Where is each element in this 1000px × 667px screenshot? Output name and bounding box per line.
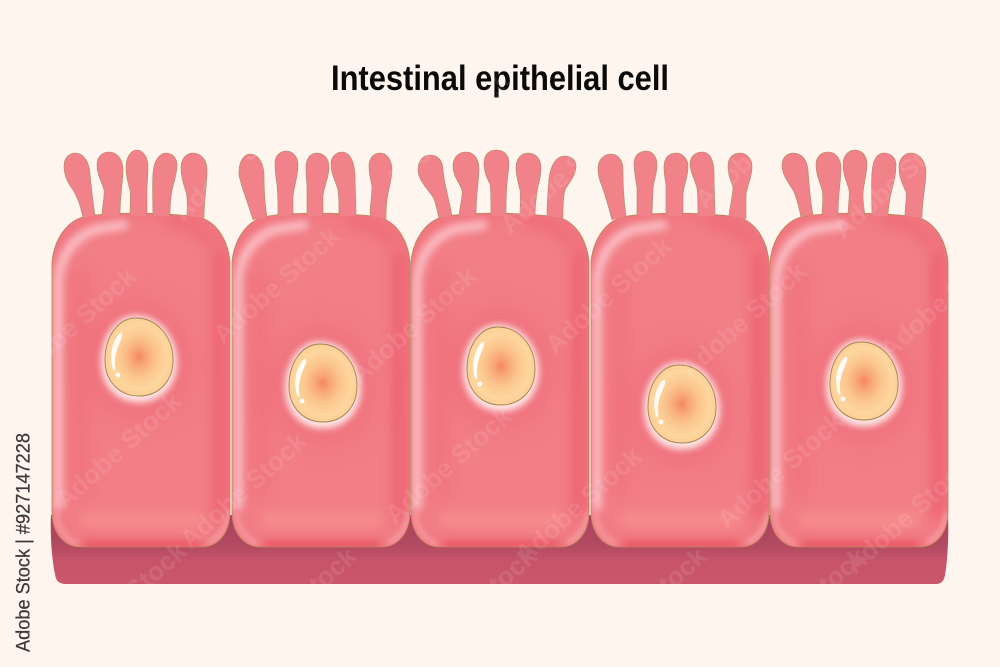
watermark pattern: Adobe Stock — [174, 425, 313, 554]
watermark pattern: Adobe Stock — [689, 85, 828, 214]
cell 5 — [770, 213, 948, 547]
nucleus 4 — [631, 348, 733, 464]
watermark pattern: Adobe Stock — [494, 110, 633, 239]
watermark pattern: Adobe Stock — [839, 450, 978, 579]
watermark pattern: Adobe Stock — [344, 260, 483, 389]
watermark pattern: Adobe Stock — [207, 220, 346, 349]
basement layer — [51, 515, 948, 584]
microvilli: cell 2 — [239, 151, 392, 220]
watermark pattern: Adobe Stock — [4, 260, 143, 389]
title: Intestinal epithelial cell — [331, 59, 669, 98]
watermark pattern: Adobe Stock — [167, 97, 306, 226]
microvilli: cell 3 — [418, 150, 576, 218]
cell 4 — [591, 213, 769, 547]
watermark pattern: Adobe Stock — [674, 255, 813, 384]
watermark pattern: Adobe Stock — [509, 440, 648, 569]
nucleus 5 — [813, 324, 915, 442]
cell 2 — [232, 213, 410, 547]
microvilli: cell 1 — [64, 150, 207, 218]
watermark pattern: Adobe Stock — [224, 540, 363, 667]
watermark pattern: Adobe Stock — [574, 540, 713, 667]
cell 1 — [52, 213, 230, 547]
nucleus 1 — [88, 300, 190, 418]
watermark pattern: Adobe Stock — [49, 385, 188, 514]
microvilli: cell 4 — [598, 151, 752, 220]
watermark pattern: Adobe Stock — [539, 230, 678, 359]
microvilli group — [64, 150, 926, 220]
watermark pattern: Adobe Stock — [711, 405, 850, 534]
watermark pattern: Adobe Stock — [734, 540, 873, 667]
watermark pattern: Adobe Stock — [379, 65, 518, 194]
watermark pattern: Adobe Stock — [404, 540, 543, 667]
nucleus 3 — [450, 310, 552, 426]
cell 3 — [411, 213, 589, 547]
watermark pattern: Adobe Stock — [379, 400, 518, 529]
nucleus 2 — [272, 326, 374, 444]
watermark pattern: Adobe Stock — [827, 115, 966, 244]
watermark pattern: Adobe Stock — [32, 50, 171, 179]
stock id text: Adobe Stock | #927147228 — [14, 433, 34, 652]
watermark pattern: Adobe Stock — [54, 535, 193, 664]
microvilli: cell 5 — [782, 150, 926, 218]
